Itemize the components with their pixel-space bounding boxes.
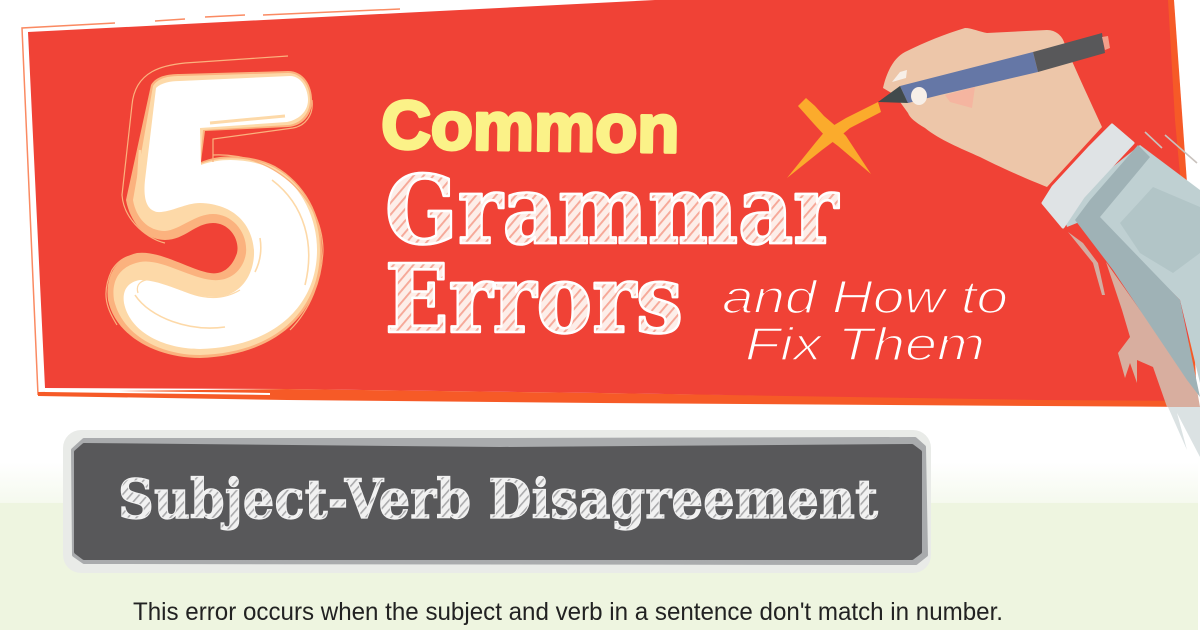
big number 5 <box>106 56 323 358</box>
section banner <box>63 430 931 573</box>
shirt cuff <box>1043 125 1133 227</box>
panel sketch outline <box>22 9 400 395</box>
icon: shirt sleeve <box>1043 125 1200 457</box>
banner grey frame <box>73 439 926 563</box>
description text: This error occurs when the subject and verb in a sentence don't match in number. <box>133 598 1003 626</box>
fingernail: thumb <box>911 87 927 105</box>
5 white core <box>124 76 317 349</box>
palm shadow <box>945 87 975 108</box>
pen grip <box>1033 33 1105 72</box>
pen barrel <box>900 52 1038 103</box>
red title panel <box>22 0 1197 407</box>
hand <box>883 28 1102 187</box>
banner heading: Subject-Verb Disagreement <box>118 468 878 532</box>
panel orange under-edge <box>38 389 1195 407</box>
panel red fill <box>28 0 1192 401</box>
title word: Common: Common <box>381 87 680 167</box>
title word: Errors: Errors <box>385 244 683 355</box>
pen end cap <box>1102 36 1110 50</box>
sleeve body <box>1063 145 1200 383</box>
sleeve shading <box>1120 187 1200 273</box>
icon: hand holding pen <box>878 28 1110 187</box>
5 cream layer <box>113 73 320 355</box>
banner outer glow <box>63 430 931 573</box>
subtitle line: Fix Them: Fix Them <box>745 318 985 370</box>
5 thin outer sketch lines <box>106 56 323 330</box>
sleeve dark fold <box>1075 145 1200 397</box>
sleeve fading wisps <box>1168 407 1200 457</box>
5 outer layer <box>107 71 322 358</box>
subtitle line: and How to: and How to <box>722 271 1008 323</box>
panel orange right edge <box>1166 0 1197 402</box>
green background band <box>0 462 1198 630</box>
5 inner cream strokes <box>135 116 309 328</box>
pen tip <box>878 86 908 103</box>
sleeve lower tatters <box>1068 232 1105 295</box>
fingernail: index <box>892 70 907 82</box>
banner dark plate <box>76 445 920 558</box>
title word: Grammar: Grammar <box>385 155 839 266</box>
icon: orange X mark <box>787 98 881 178</box>
